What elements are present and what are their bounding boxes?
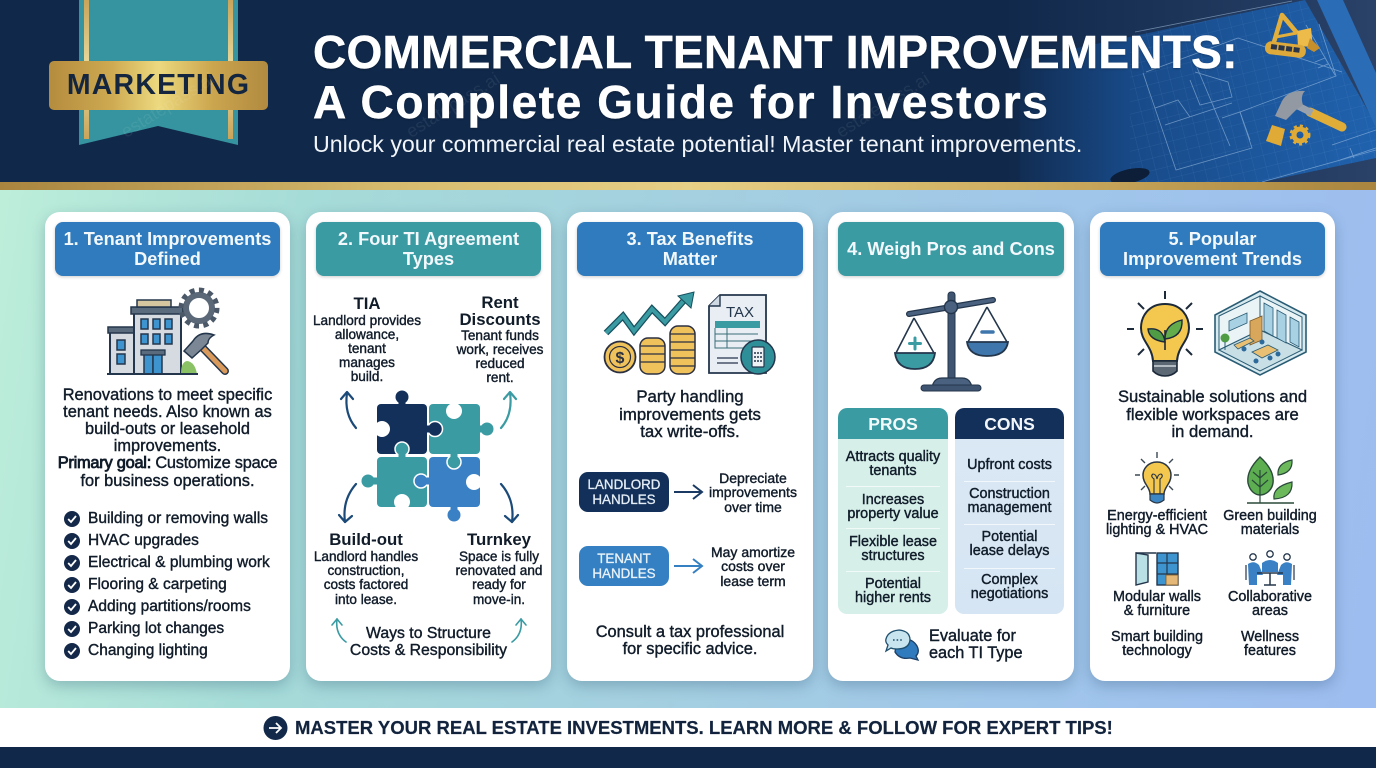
- pros items: [846, 449, 940, 479]
- icon: speech bubbles: [884, 629, 920, 661]
- icon: excavator: [1265, 12, 1320, 58]
- footer text: MASTER YOUR REAL ESTATE INVESTMENTS. LEARN MORE & FOLLOW FOR EXPERT TIPS!: [295, 717, 1113, 738]
- cons column: Potential: [981, 529, 1038, 545]
- gold divider: [0, 182, 1376, 190]
- description text: for business operations.: [80, 472, 255, 490]
- puzzle icon with arrows: [338, 390, 520, 524]
- evaluate text: [929, 626, 1023, 662]
- header banner: estatepass.ai: [832, 68, 933, 142]
- icon: chart, coins and tax form: $: [616, 350, 625, 367]
- panel: four TI agreement types: [306, 212, 551, 681]
- check icons: [64, 511, 80, 659]
- pill: landlord handles: [579, 472, 669, 512]
- pill: tenant handles: [579, 546, 669, 586]
- type: rent discounts: [456, 292, 544, 385]
- type: turnkey: Space is fully: [459, 549, 539, 564]
- heading: [316, 222, 541, 276]
- cons heading: [955, 408, 1064, 439]
- label: collaborative areas: [1228, 589, 1312, 619]
- heading: 3. Tax Benefits: [626, 229, 754, 249]
- summary text: tax write-offs.: [640, 422, 740, 441]
- checklist text: Electrical & plumbing work: [88, 554, 270, 571]
- arrow: tenant: [674, 558, 704, 574]
- type: rent discounts: rent.: [486, 370, 514, 385]
- title: [313, 26, 1238, 129]
- pill: tenant handles: HANDLES: [592, 566, 656, 581]
- heading: [838, 222, 1064, 276]
- heading: [55, 222, 280, 276]
- evaluate text: Evaluate for: [929, 626, 1016, 644]
- type: TIA: TIA: [353, 294, 381, 312]
- label: modular walls: & furniture: [1124, 603, 1190, 619]
- type: TIA: build.: [351, 369, 383, 384]
- type: build-out: Build-out: [329, 530, 403, 548]
- panel: tenant improvements defined: [45, 212, 290, 681]
- type: rent discounts: Tenant funds: [461, 328, 539, 342]
- cons column: [955, 408, 1064, 614]
- heading: Improvement Trends: [1123, 249, 1302, 269]
- blueprint illustration: [1020, 0, 1376, 182]
- type: rent discounts: Discounts: [459, 310, 541, 328]
- cons heading: CONS: [984, 414, 1035, 434]
- label: modular walls: [1113, 589, 1201, 619]
- landlord result: [709, 470, 797, 515]
- type: turnkey: [456, 530, 542, 606]
- description text: Renovations to meet specific: [63, 386, 272, 404]
- pros column: property value: [847, 506, 939, 522]
- advice text: for specific advice.: [623, 640, 757, 658]
- label: modular walls: Modular walls: [1113, 589, 1201, 605]
- summary text: in demand.: [1171, 422, 1254, 441]
- icon: chart, coins and tax form: TAX: [726, 304, 754, 321]
- checklist text: Parking lot changes: [88, 620, 224, 637]
- badge: marketing: [49, 61, 268, 110]
- cons items: Upfront costs: [967, 457, 1052, 473]
- tenant result: May amortize: [711, 544, 795, 560]
- bottom navy band: [0, 747, 1376, 768]
- label: wellness: [1215, 630, 1325, 659]
- checklist text: HVAC upgrades: [88, 532, 199, 549]
- heading: [1100, 222, 1325, 276]
- label: smart building: technology: [1122, 643, 1192, 659]
- cons column: Complex: [981, 572, 1038, 588]
- advice text: Consult a tax professional: [596, 622, 784, 640]
- caption: Costs & Responsibility: [350, 642, 507, 658]
- icon: efficient bulb: [1135, 452, 1179, 504]
- title: COMMERCIAL TENANT IMPROVEMENTS:: [313, 26, 1238, 78]
- checklist text: [88, 510, 270, 659]
- heading: 5. Popular: [1169, 229, 1256, 249]
- heading: 1. Tenant Improvements: [64, 229, 271, 249]
- label: collaborative areas: Collaborative: [1228, 589, 1312, 605]
- label: smart building: Smart building: [1111, 629, 1203, 645]
- icon: door and modular wall: [1135, 552, 1179, 586]
- type: rent discounts: Rent: [481, 292, 519, 312]
- evaluate text: each TI Type: [929, 644, 1023, 662]
- checklist text: Building or removing walls: [88, 510, 268, 527]
- description text: [58, 386, 277, 490]
- summary text: Sustainable solutions and: [1118, 387, 1307, 406]
- heading: 4. Weigh Pros and Cons: [847, 239, 1055, 259]
- advice text: [596, 622, 784, 658]
- heading: [577, 222, 803, 276]
- pros column: Flexible lease: [849, 534, 937, 550]
- summary text: [619, 387, 761, 441]
- heading: Types: [403, 249, 454, 269]
- panel: improvement trends: [1090, 212, 1335, 681]
- label: energy-efficient: lighting & HVAC: [1106, 522, 1208, 538]
- label: wellness: Wellness: [1241, 629, 1299, 645]
- label: wellness: features: [1244, 643, 1296, 659]
- checklist: [64, 510, 270, 659]
- pill: landlord handles: HANDLES: [592, 492, 656, 507]
- type: turnkey: Turnkey: [467, 530, 531, 548]
- pros column: [838, 408, 948, 614]
- label: collaborative areas: areas: [1252, 603, 1288, 619]
- badge: marketing: MARKETING: [67, 69, 250, 101]
- type: build-out: costs factored: [324, 577, 408, 592]
- pros items: tenants: [869, 463, 917, 479]
- cons column: negotiations: [971, 586, 1048, 602]
- checklist text: Adding partitions/rooms: [88, 598, 251, 615]
- pros column: structures: [861, 548, 925, 564]
- cons column: Construction: [969, 486, 1050, 502]
- landlord result: over time: [724, 499, 782, 515]
- cons column: management: [968, 500, 1052, 516]
- checklist text: Flooring & carpeting: [88, 576, 227, 593]
- landlord result: Depreciate: [719, 470, 787, 486]
- type: build-out: construction,: [327, 563, 405, 578]
- summary text: [1118, 387, 1307, 441]
- subtitle: Unlock your commercial real estate potential! Master tenant improvements.: [313, 131, 1082, 157]
- ribbon: [79, 0, 238, 145]
- panel: tax benefits: [567, 212, 813, 681]
- pros column: Potential: [865, 576, 921, 592]
- icon: team at table: [1245, 550, 1295, 586]
- icon: balance scale: [894, 292, 1009, 392]
- type: build-out: Landlord handles: [314, 549, 418, 564]
- icon: chart, coins and tax form: [604, 291, 776, 375]
- type: build-out: into lease.: [335, 592, 397, 606]
- description text: Primary goal: Customize space: [58, 454, 277, 472]
- icon: building, gear and hammer: [107, 288, 229, 375]
- type: turnkey: renovated and: [456, 563, 542, 578]
- type: rent discounts: reduced: [475, 356, 525, 371]
- arrows: bottom pair: [331, 618, 527, 643]
- type: TIA: [313, 294, 421, 384]
- tenant result: lease term: [720, 573, 786, 589]
- type: TIA: Landlord provides: [313, 312, 421, 328]
- pros heading: [838, 408, 948, 439]
- pill: tenant handles: TENANT: [597, 551, 651, 566]
- footer call to action: [0, 708, 1376, 747]
- cons column: lease delays: [970, 543, 1050, 559]
- description text: build-outs or leasehold: [85, 420, 250, 438]
- summary text: flexible workspaces are: [1126, 405, 1299, 424]
- label: energy-efficient: [1106, 508, 1208, 538]
- icon: hammer and gear: [1266, 90, 1346, 146]
- icon: isometric workspace: [1214, 290, 1307, 376]
- pros items: Attracts quality: [846, 449, 940, 465]
- icon: eco light bulb: [1127, 291, 1203, 377]
- description text: tenant needs. Also known as: [63, 403, 272, 421]
- type: rent discounts: work, receives: [457, 342, 543, 357]
- summary text: Party handling: [636, 387, 744, 406]
- checklist text: Changing lighting: [88, 642, 208, 659]
- pros column: Increases: [862, 492, 924, 508]
- icon: green leaves: [1247, 456, 1294, 504]
- heading: 2. Four TI Agreement: [338, 229, 519, 249]
- type: turnkey: move-in.: [473, 592, 525, 606]
- label: green building: [1223, 508, 1317, 538]
- caption: Ways to Structure: [366, 624, 491, 642]
- label: energy-efficient: Energy-efficient: [1107, 508, 1207, 524]
- tenant result: costs over: [721, 558, 785, 574]
- pill: landlord handles: LANDLORD: [588, 477, 660, 492]
- header banner: estatepass.ai: [402, 68, 503, 142]
- title: A Complete Guide for Investors: [313, 76, 1049, 128]
- caption: [350, 624, 508, 659]
- tenant result: [711, 544, 795, 589]
- label: green building: Green building: [1223, 508, 1317, 524]
- page background gradient: [0, 190, 1376, 708]
- label: smart building: [1111, 629, 1203, 659]
- summary text: improvements gets: [619, 405, 761, 424]
- landlord result: improvements: [709, 484, 797, 500]
- label: green building: materials: [1241, 522, 1299, 538]
- type: TIA: tenant: [348, 341, 386, 356]
- type: build-out: [314, 530, 418, 606]
- header banner: estatepass.ai: [117, 68, 218, 142]
- panel: pros and cons: [828, 212, 1074, 681]
- type: TIA: manages: [339, 355, 395, 370]
- header banner: [0, 0, 1376, 190]
- type: TIA: allowance,: [335, 327, 399, 342]
- type: turnkey: ready for: [472, 577, 526, 592]
- pros column: higher rents: [855, 590, 931, 606]
- description text: improvements.: [114, 437, 221, 455]
- heading: Defined: [134, 249, 201, 269]
- arrow: landlord: [674, 484, 704, 500]
- icon: arrow circle: [263, 716, 288, 741]
- pros heading: PROS: [868, 414, 918, 434]
- heading: Matter: [663, 249, 717, 269]
